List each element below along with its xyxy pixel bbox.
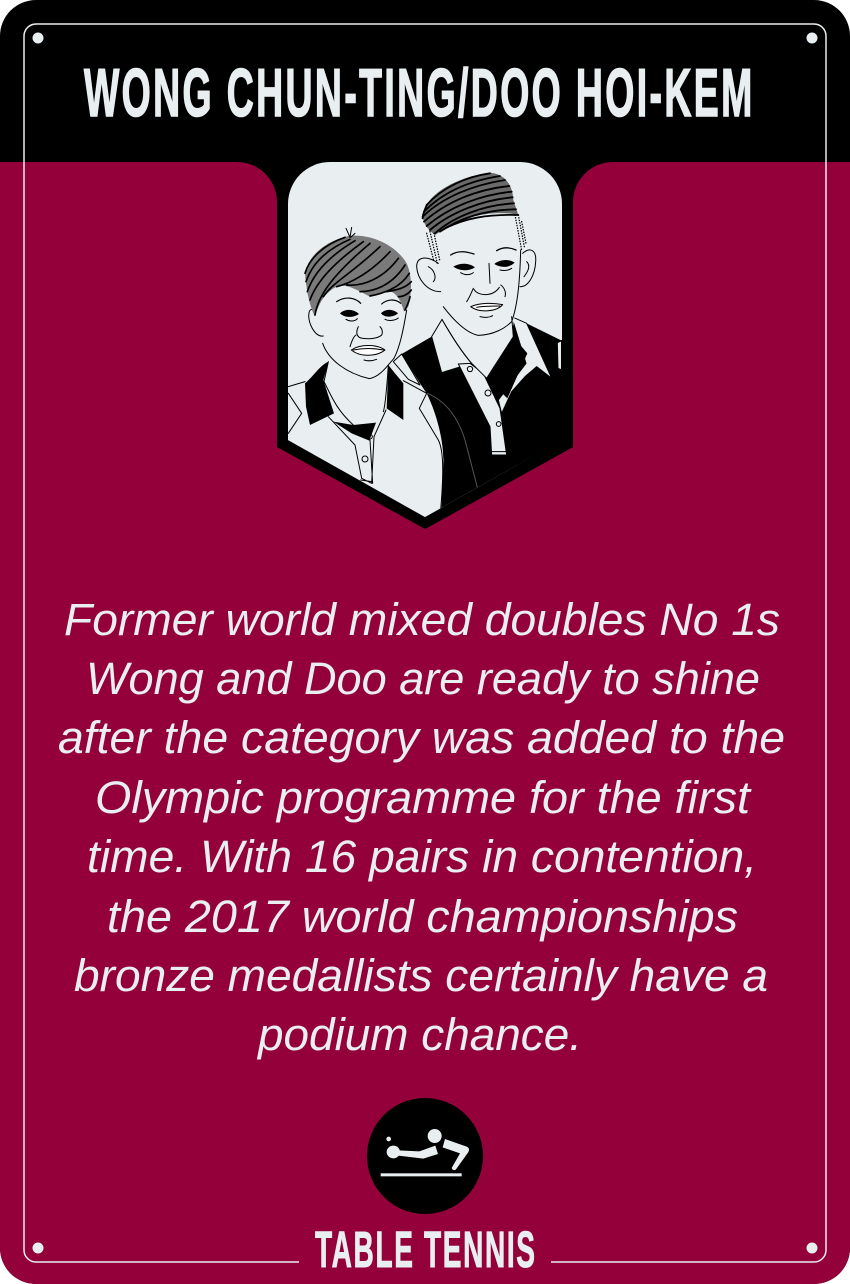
man neck and face <box>442 316 514 376</box>
man brows and eyes <box>451 248 516 255</box>
woman nose and mouth <box>350 327 382 347</box>
body text: Wong and Doo are ready to shine <box>86 653 760 704</box>
woman shoulders <box>288 394 444 517</box>
man neck V <box>503 346 528 398</box>
woman brows and eyes <box>337 298 401 304</box>
woman hair <box>305 236 411 317</box>
man ears <box>417 258 441 292</box>
body text: after the category was added to the <box>58 712 785 763</box>
body text: the 2017 world championships <box>107 891 738 942</box>
man torso <box>402 324 561 508</box>
woman sleeve line <box>427 393 477 487</box>
body text: podium chance. <box>256 1009 582 1060</box>
woman face <box>315 283 407 378</box>
man collar and placket <box>393 317 562 455</box>
man nose and mouth <box>467 263 505 302</box>
body text: time. With 16 pairs in contention, <box>87 831 757 882</box>
icon: table tennis player <box>367 1098 483 1214</box>
body text: Olympic programme for the first <box>95 772 753 823</box>
title: WONG CHUN-TING/DOO HOI-KEM <box>84 54 752 131</box>
man hair <box>423 173 518 235</box>
body text: bronze medallists certainly have a <box>74 950 768 1001</box>
body text: Former world mixed doubles No 1s <box>64 594 780 645</box>
woman collar <box>305 362 334 425</box>
footer label: TABLE TENNIS <box>315 1221 535 1278</box>
woman placket and button <box>328 410 386 483</box>
body text <box>58 594 785 1060</box>
portrait panel <box>283 162 573 550</box>
